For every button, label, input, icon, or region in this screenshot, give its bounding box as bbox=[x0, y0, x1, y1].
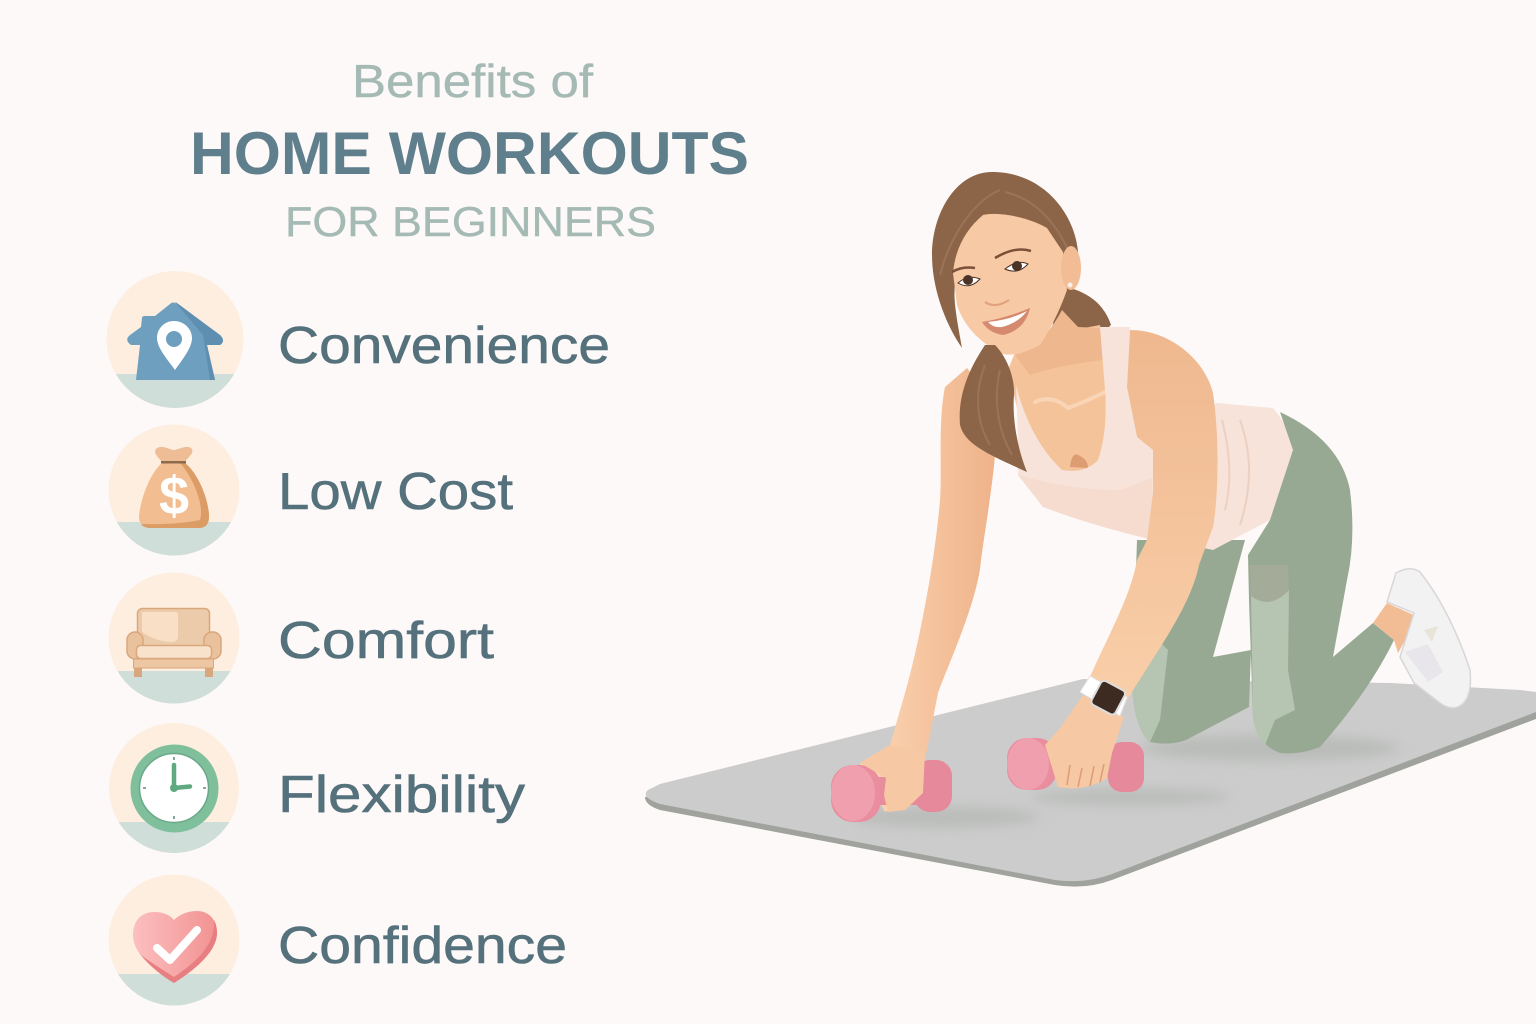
shoe bbox=[1387, 569, 1470, 708]
tank folds bbox=[1222, 420, 1249, 525]
neck shadow bbox=[1015, 310, 1103, 375]
near hand bbox=[1045, 695, 1124, 788]
yoga mat bbox=[645, 679, 1536, 887]
far leg bbox=[1132, 540, 1251, 744]
illustration: woman exercising on a mat bbox=[645, 172, 1536, 887]
thigh highlight bbox=[1251, 590, 1295, 745]
title line: Benefits of: Benefits of bbox=[352, 55, 593, 107]
far hand bbox=[860, 745, 925, 812]
tank top bbox=[1016, 327, 1293, 550]
cleavage shadow bbox=[1070, 454, 1088, 468]
ponytail behind neck bbox=[1050, 285, 1111, 345]
hip and near thigh bbox=[1248, 412, 1394, 753]
hair strand highlights bbox=[940, 190, 1070, 275]
benefit: low cost bbox=[100, 424, 514, 562]
collarbone highlight bbox=[1035, 392, 1105, 408]
title line: For Beginners: FOR BEGINNERS bbox=[285, 198, 656, 245]
smile bbox=[982, 308, 1030, 335]
icon: clock bbox=[109, 723, 239, 853]
title line: Home Workouts: HOME WORKOUTS bbox=[190, 120, 749, 187]
icon: sofa bbox=[108, 572, 240, 704]
title bbox=[190, 55, 749, 245]
icon: heart with check bbox=[108, 874, 240, 1006]
label: Low Cost: Low Cost bbox=[278, 463, 514, 521]
neck and chest bbox=[1008, 325, 1115, 480]
far arm bbox=[860, 368, 1000, 812]
face bbox=[953, 214, 1067, 355]
icon: money bag: $ bbox=[159, 466, 189, 526]
benefit: comfort bbox=[100, 572, 495, 711]
near arm bbox=[1083, 330, 1218, 707]
label: Comfort: Comfort bbox=[278, 612, 495, 670]
ear bbox=[1061, 246, 1081, 290]
benefit: flexibility bbox=[100, 723, 525, 862]
eyes and brows bbox=[952, 250, 1031, 286]
label: Confidence: Confidence bbox=[278, 917, 567, 975]
watch bbox=[1080, 676, 1127, 716]
icon: money bag bbox=[108, 424, 240, 556]
icon: house with location pin bbox=[106, 271, 244, 408]
benefit: confidence bbox=[100, 874, 567, 1014]
benefit: convenience bbox=[100, 271, 610, 414]
label: Convenience: Convenience bbox=[278, 317, 610, 375]
hair back bbox=[932, 172, 1078, 348]
near dumbbell bbox=[831, 760, 952, 822]
ankle bbox=[1373, 603, 1418, 653]
nose bbox=[985, 300, 1009, 305]
label: Flexibility: Flexibility bbox=[278, 766, 525, 824]
far dumbbell bbox=[1007, 738, 1144, 792]
ponytail front bbox=[960, 345, 1027, 472]
